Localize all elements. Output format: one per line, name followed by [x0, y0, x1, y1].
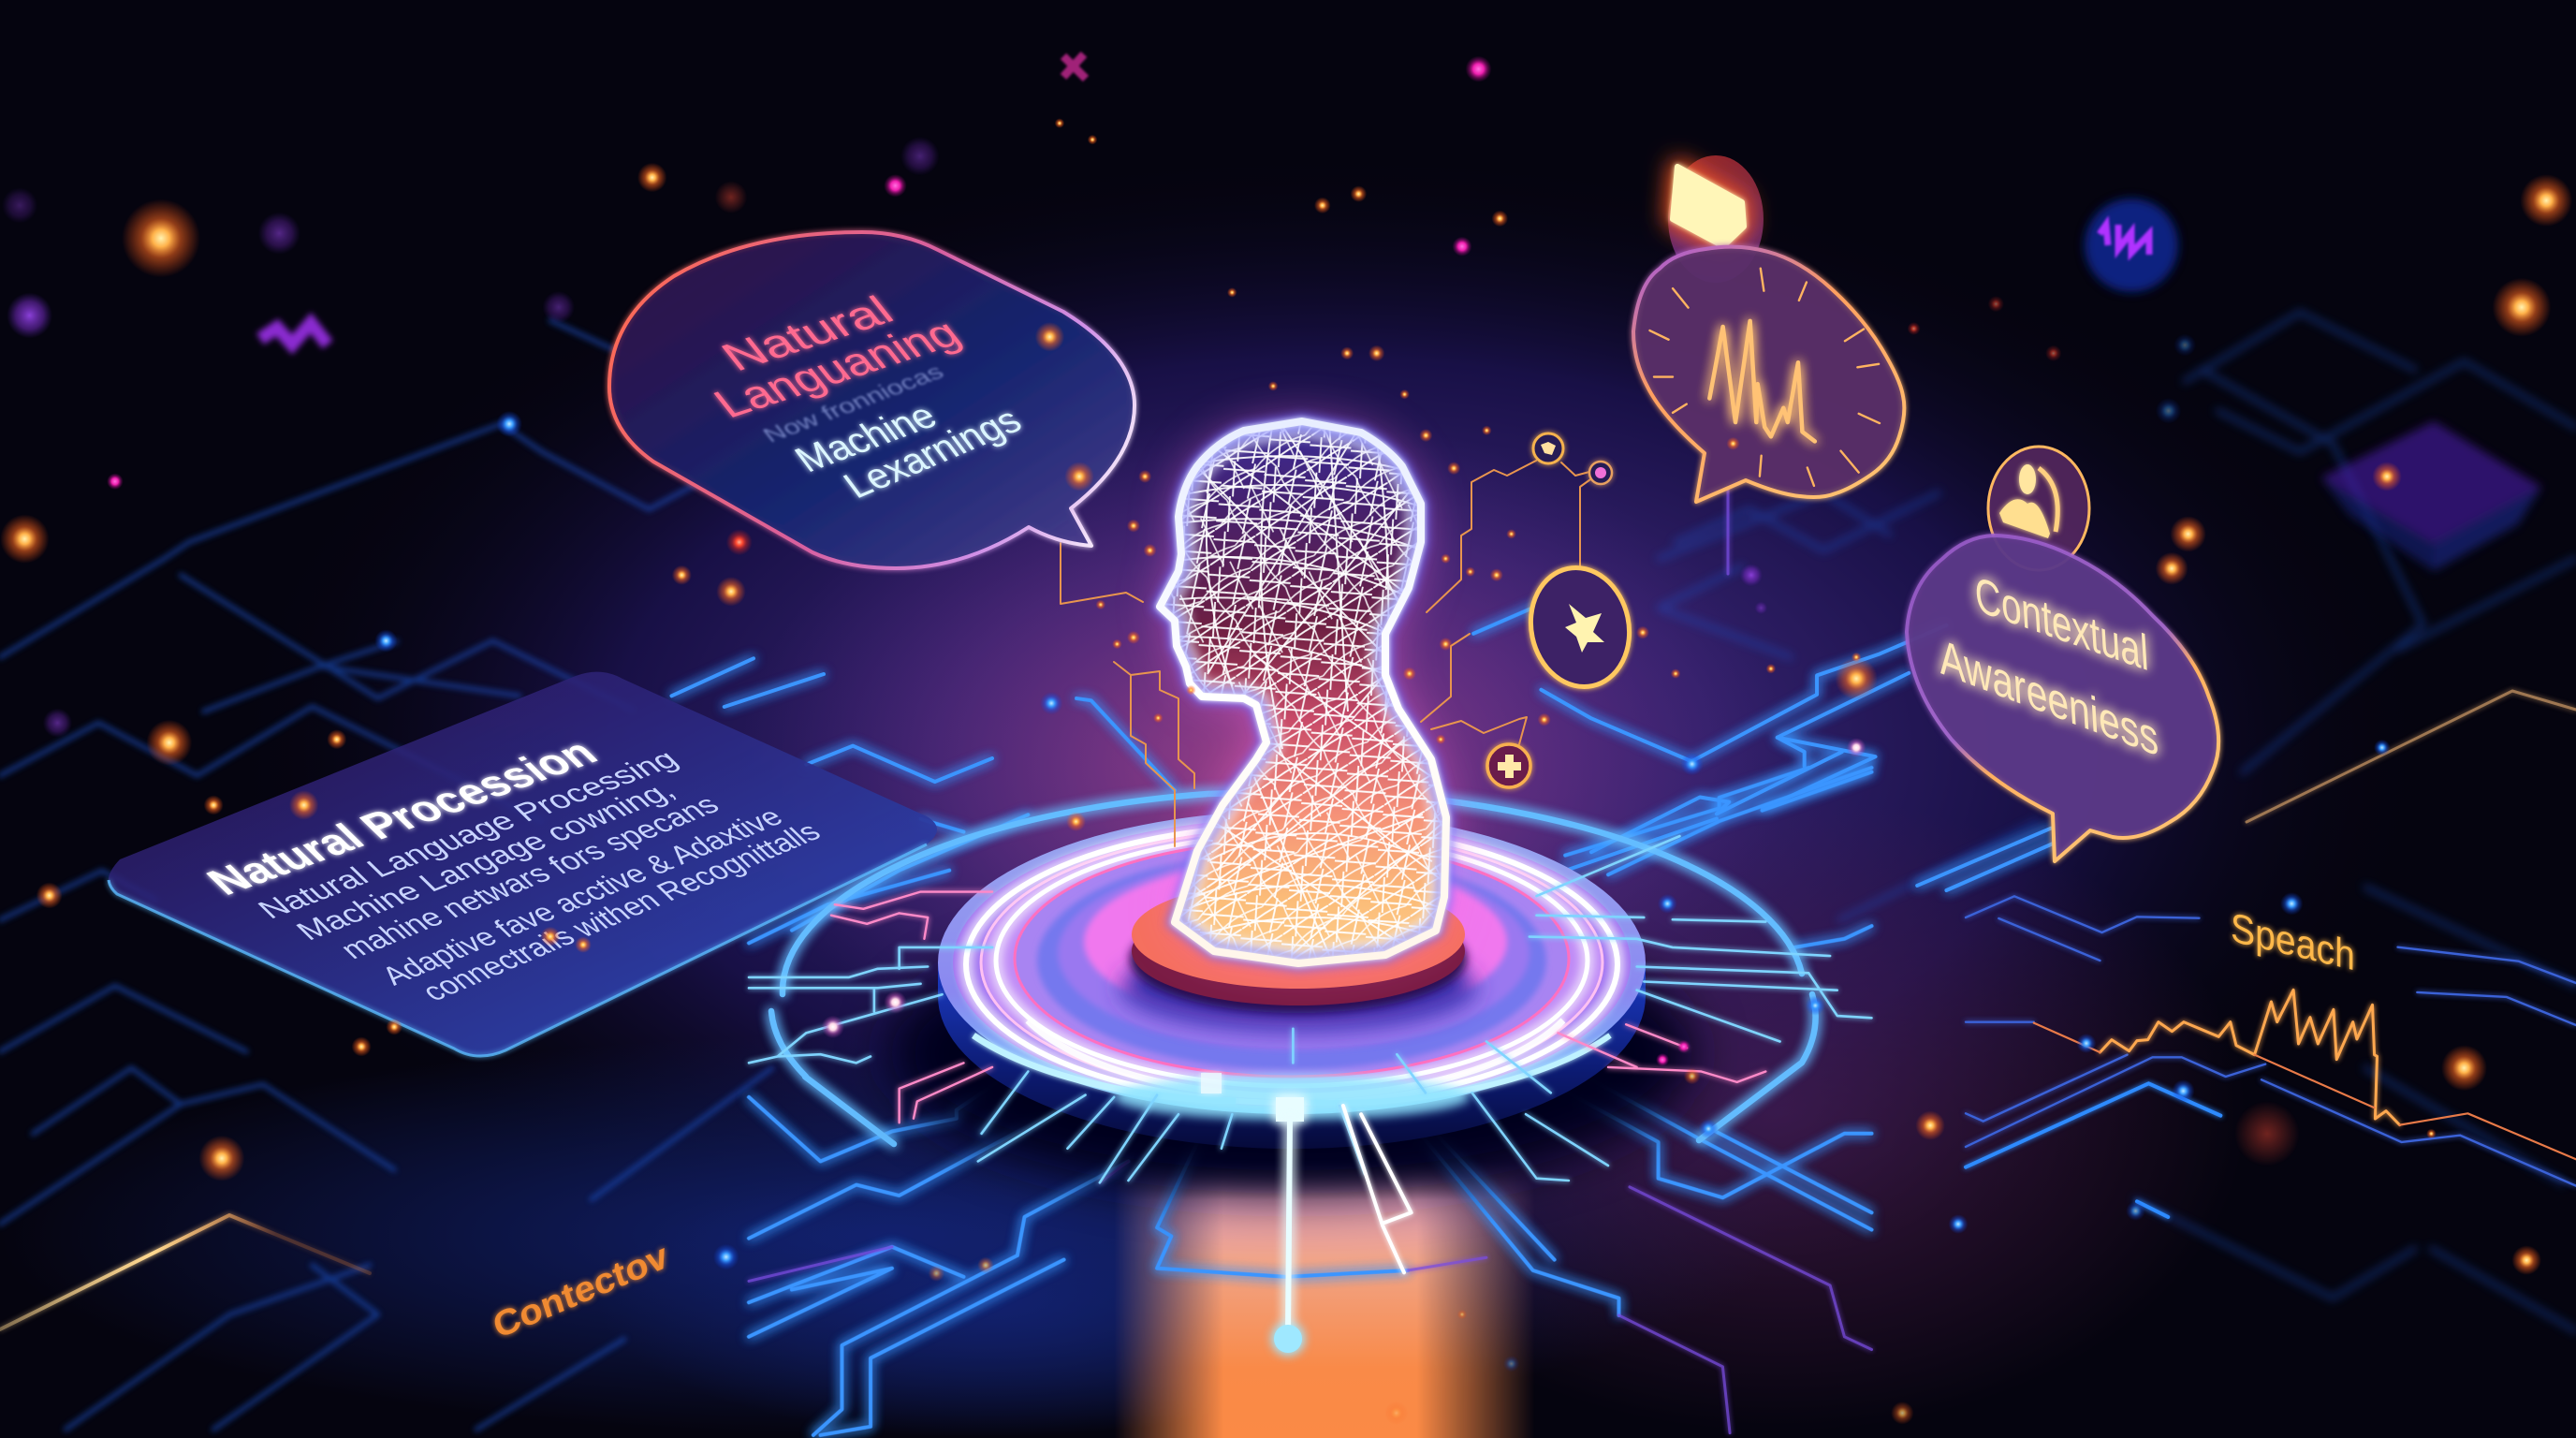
- waveform line: [2100, 990, 2400, 1125]
- icon: pink node: [1589, 462, 1612, 484]
- card body text: [251, 745, 828, 1007]
- text: contextual awareness: Awareeniess: [1938, 628, 2159, 768]
- faint background circuit network: left: [0, 320, 772, 1430]
- blue nodes: [374, 333, 2391, 1372]
- card body text: Adaptive fave acctive & Adaxtive: [374, 802, 790, 991]
- bright blue circuit traces: [672, 592, 2056, 1435]
- icon: glowing tag: [1668, 155, 1764, 283]
- orange light beam: [1114, 1161, 1535, 1438]
- purple cube: [2321, 421, 2541, 571]
- card body text: Machine Langage cowning,: [289, 776, 682, 946]
- label: speach: Speach: [2231, 904, 2355, 980]
- icon: star node: [1520, 559, 1640, 696]
- heading text: natural language: Natural: [712, 288, 903, 380]
- node network lines: [1061, 461, 1593, 846]
- central platform: [889, 811, 1694, 1194]
- dim purple orbs: [2, 137, 1767, 738]
- faint background circuit network: right: [1660, 312, 2576, 1331]
- icon: plus node: [1487, 744, 1530, 787]
- gauge ticks: [1649, 269, 1880, 486]
- heading text: natural language: Languaning: [705, 311, 971, 427]
- dim violet traces: [749, 487, 1872, 1433]
- speech waveform and label: [1966, 896, 2576, 1217]
- card heading: Natural Procession: [197, 731, 607, 903]
- platform top rings: [938, 811, 1646, 1120]
- text: machine learnings: Machine: [786, 395, 944, 479]
- small orange sparks: [37, 118, 2437, 1319]
- speech bubble: contextual awareness: [1907, 447, 2218, 861]
- purple squiggle: [260, 323, 328, 345]
- icon: person in circle: [1988, 447, 2089, 570]
- gold streaks: [0, 691, 2576, 1329]
- label: contectov: Contectov: [489, 1237, 673, 1347]
- red sparks: [714, 181, 2300, 1167]
- panel: natural processing card: [109, 672, 937, 1056]
- text: contextual awareness: Contextual: [1973, 565, 2150, 682]
- pink and magenta sparks: [107, 56, 1690, 1066]
- center trace and terminal node: [1274, 1119, 1302, 1353]
- card body text: Natural Language Processing: [251, 745, 685, 925]
- blue badge with purple glyph: [2085, 198, 2178, 292]
- text: machine learnings: Lexarnings: [835, 400, 1030, 506]
- waveform: [1709, 321, 1815, 441]
- outer blue ring: [771, 791, 1816, 1144]
- card body text: mahine netwars fors specans: [333, 790, 726, 965]
- icon: small top node: [1533, 433, 1563, 463]
- text: contextual awareness: [1938, 565, 2159, 768]
- pink cross glyph: [1063, 54, 1086, 79]
- speech bubble: natural language and machine learning: [609, 232, 1134, 568]
- platform side: [938, 962, 1646, 1149]
- wireframe head: [1151, 412, 1460, 974]
- radial traces from platform: [749, 836, 1872, 1182]
- card body text: connectrails withen Recognittalls: [415, 817, 828, 1007]
- speech bubble: waveform gauge: [1633, 155, 1904, 502]
- coral pedestal: [1130, 880, 1467, 1013]
- node square: [1276, 1097, 1304, 1122]
- faint sub text: Now fronniocas: [758, 360, 949, 448]
